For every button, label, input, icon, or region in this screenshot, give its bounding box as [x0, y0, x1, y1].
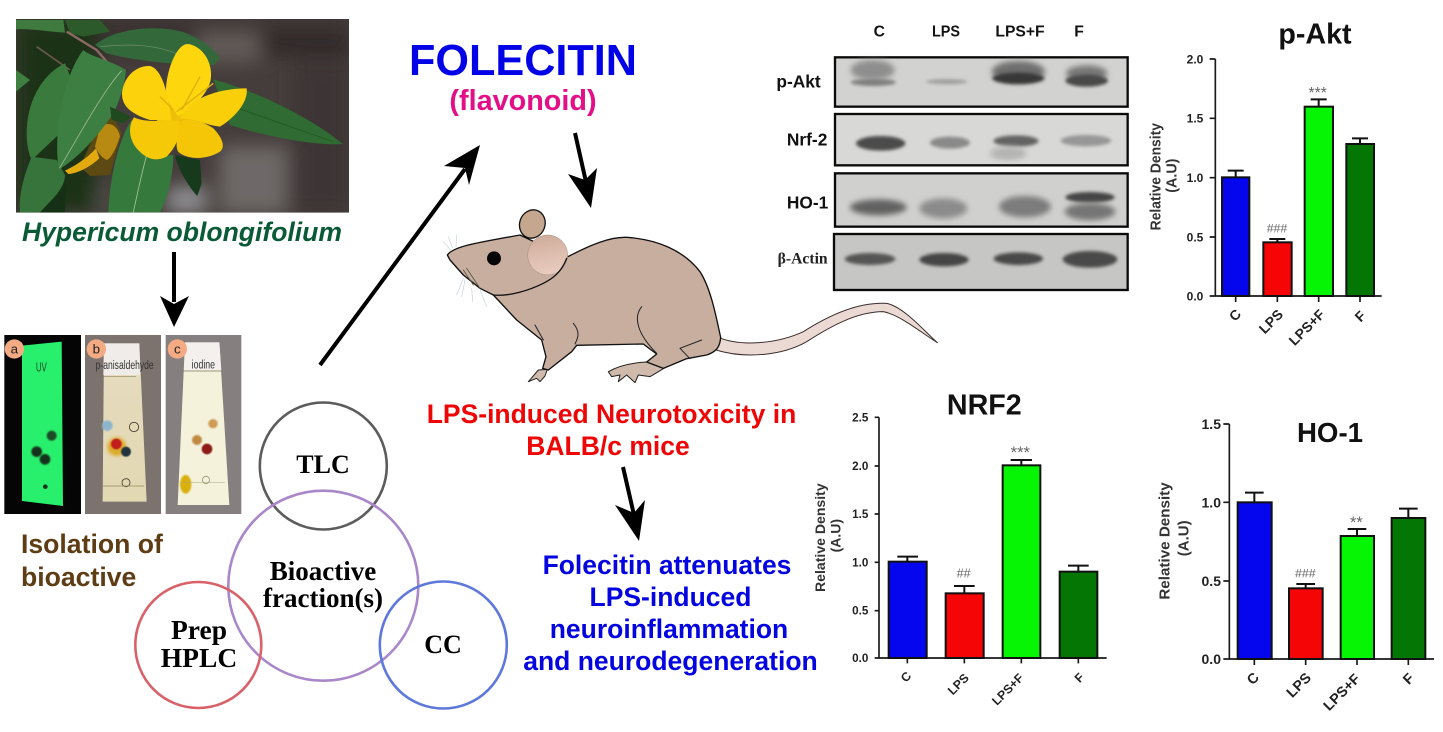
y tick labels: 1.5 — [1187, 112, 1204, 126]
category labels: F — [1400, 670, 1418, 688]
axes — [875, 417, 1107, 663]
subtitle: flavonoid: (flavonoid) — [449, 85, 597, 117]
y tick labels: 0.0 — [1187, 289, 1204, 303]
plate c: iodine: c — [174, 342, 181, 357]
conclusion text: and neurodegeneration — [523, 646, 818, 676]
chart title: p-Akt — [1278, 18, 1352, 50]
plate a: UV: a — [11, 342, 19, 357]
y axis label: Relative Density — [812, 483, 828, 592]
plate c: iodine: iodine — [192, 357, 215, 371]
species name label: Hypericum oblongifolium — [22, 217, 342, 247]
blot: Nrf-2 — [787, 114, 1128, 165]
chart title: HO-1 — [1297, 417, 1363, 448]
panel: western blots — [776, 24, 1128, 290]
isolation caption: Isolation of — [21, 529, 163, 559]
blot: HO-1 — [787, 173, 1128, 227]
y tick labels — [852, 411, 869, 665]
category labels: LPS — [1284, 670, 1315, 701]
arrow: folecitin to mouse — [568, 133, 597, 208]
significance marks: ** — [1350, 514, 1363, 532]
isolation caption: bioactive — [21, 562, 136, 592]
y tick labels: 1.5 — [852, 508, 869, 521]
illustration: mouse — [443, 206, 937, 383]
y tick labels: 2.5 — [852, 411, 869, 424]
significance marks: ## — [957, 566, 971, 580]
venn diagram: separation techniques — [135, 402, 507, 708]
y tick labels — [1187, 52, 1204, 303]
category labels: C — [1226, 306, 1244, 324]
bars — [1238, 493, 1425, 659]
category labels: C — [898, 669, 914, 685]
y axis label: Relative Density — [1149, 123, 1165, 230]
circle: Prep HPLC: HPLC — [161, 642, 237, 673]
circle: CC — [380, 582, 507, 708]
chart title: NRF2 — [947, 390, 1022, 422]
conclusion text: LPS-induced — [590, 582, 751, 612]
circle: Prep HPLC — [135, 582, 261, 708]
blot: HO-1: HO-1 — [787, 193, 829, 213]
y tick labels: 2.0 — [1187, 52, 1204, 66]
chart: NRF2 bar chart — [812, 390, 1107, 708]
category labels: F — [1351, 307, 1369, 325]
flower bud behind leaf — [80, 117, 122, 176]
y tick labels — [1202, 416, 1221, 667]
plate b: p-anisaldehyde — [85, 335, 161, 514]
category labels — [1226, 306, 1369, 348]
category labels: LPS — [945, 671, 972, 698]
lane labels: LPS — [932, 24, 960, 41]
significance marks — [1295, 514, 1363, 581]
category labels — [1244, 670, 1418, 714]
category labels: LPS — [1256, 306, 1286, 337]
title: FOLECITIN: FOLECITIN — [409, 37, 637, 85]
circle: Prep HPLC: Prep — [171, 614, 227, 645]
y tick labels: 0.0 — [852, 652, 868, 665]
blot: Nrf-2: Nrf-2 — [787, 129, 827, 149]
plate a: UV — [4, 335, 81, 514]
significance marks: ### — [1267, 222, 1287, 236]
circle: TLC — [260, 402, 387, 530]
y axis label: (A.U) — [1165, 158, 1181, 193]
plate a: UV: UV — [36, 361, 47, 375]
blot: beta-actin — [778, 234, 1128, 290]
arrow: model to outcome — [615, 467, 645, 541]
plate c: iodine — [166, 335, 241, 514]
y tick labels: 1.0 — [852, 556, 868, 569]
bars — [889, 460, 1097, 658]
y axis label: (A.U) — [828, 519, 844, 552]
circle: CC: CC — [424, 630, 462, 659]
y tick labels: 0.0 — [1202, 651, 1221, 667]
lane labels: LPS+F — [995, 24, 1045, 41]
category labels: C — [1244, 670, 1263, 688]
y tick labels: 2.0 — [852, 460, 868, 473]
significance marks — [957, 443, 1031, 580]
circle: TLC: TLC — [296, 450, 350, 479]
circle: bioactive fractions: Bioactive — [270, 556, 376, 586]
label: LPS neurotoxicity model: LPS-induced Neurotoxicity in — [427, 399, 796, 429]
category labels: LPS+F — [1321, 671, 1364, 714]
significance marks: *** — [1011, 443, 1031, 462]
lane labels — [874, 24, 1084, 41]
y tick labels: 1.0 — [1202, 494, 1221, 510]
y axis label: Relative Density — [1156, 482, 1173, 600]
y tick labels: 1.5 — [1202, 416, 1221, 432]
blot: p-Akt — [776, 57, 1128, 107]
arrow: plant to TLC plates — [160, 252, 189, 327]
y tick labels: 0.5 — [1202, 573, 1221, 589]
blot: p-Akt: p-Akt — [776, 71, 821, 91]
photo: Hypericum oblongifolium flower — [16, 19, 350, 213]
significance marks — [1267, 85, 1327, 236]
blot: beta-actin: β-Actin — [778, 250, 828, 267]
arrow: fraction to folecitin — [320, 145, 480, 365]
lane labels: F — [1074, 24, 1084, 41]
category labels: F — [1072, 670, 1087, 685]
category labels — [898, 669, 1087, 708]
chart: HO-1 bar chart — [1156, 416, 1434, 714]
axes — [1210, 59, 1382, 302]
significance marks: ### — [1295, 567, 1316, 581]
chart: p-Akt bar chart — [1149, 18, 1382, 348]
y tick labels: 0.5 — [852, 605, 869, 618]
y axis label: (A.U) — [1175, 520, 1192, 556]
category labels: LPS+F — [989, 671, 1027, 708]
axes — [1223, 424, 1434, 665]
label: LPS neurotoxicity model: BALB/c mice — [526, 431, 690, 461]
plate b: p-anisaldehyde: b — [93, 342, 100, 357]
lane labels: C — [874, 24, 885, 41]
bars — [1222, 99, 1374, 296]
significance marks: *** — [1309, 85, 1327, 102]
category labels: LPS+F — [1285, 306, 1328, 348]
panel: TLC plates — [4, 335, 241, 514]
y tick labels: 1.0 — [1187, 171, 1204, 185]
y tick labels: 0.5 — [1187, 230, 1204, 244]
plate b: p-anisaldehyde: p-anisaldehyde — [96, 358, 154, 372]
circle: bioactive fractions: fraction(s) — [263, 583, 383, 613]
conclusion text: neuroinflammation — [550, 614, 788, 644]
conclusion text: Folecitin attenuates — [543, 550, 791, 580]
circle: bioactive fractions — [228, 491, 418, 681]
